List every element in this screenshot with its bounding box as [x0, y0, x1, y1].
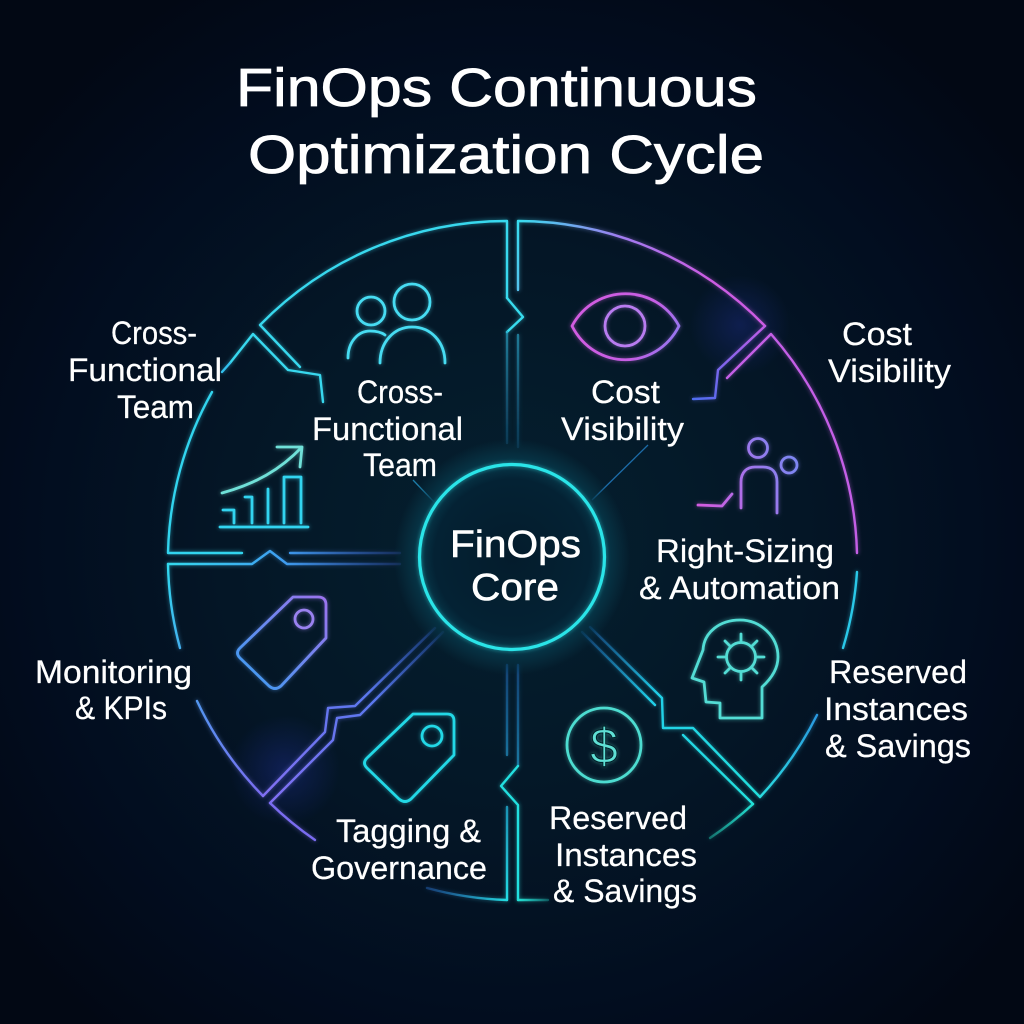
- label: right-sizing and automation: [639, 533, 840, 606]
- segment divider: bottom lines: [507, 665, 518, 900]
- segment arc: bottom left: [270, 803, 315, 840]
- label: right-sizing and automation: Right-Sizing: [656, 533, 834, 569]
- segment divider: bottom chevron: [501, 766, 518, 900]
- label: monitoring and KPIs: Monitoring: [35, 654, 192, 690]
- segment arc: left lower: [168, 564, 263, 796]
- label: cost visibility inner: [561, 374, 684, 447]
- core node: [394, 439, 630, 675]
- segment arc: lower right: [760, 715, 817, 797]
- segment outline: top right: [518, 221, 765, 326]
- segment outline: top left: [260, 221, 507, 367]
- segment arc: right lower: [843, 572, 857, 648]
- icon: person at desk: [698, 438, 797, 513]
- label: reserved instances outer: & Savings: [825, 728, 971, 764]
- label: cross-functional team outer: Functional: [68, 352, 222, 388]
- icon: price tag teal: [364, 714, 454, 802]
- segment arc: lower: [710, 804, 753, 838]
- icon: eye: [572, 294, 679, 360]
- label: monitoring and KPIs: [35, 654, 192, 726]
- label: reserved instances inner: Reserved: [549, 800, 687, 836]
- icon: head with gear: [692, 620, 778, 718]
- segment end: bottom right: [518, 899, 548, 901]
- segment arc: left upper: [168, 392, 242, 553]
- label: right-sizing and automation: & Automation: [639, 570, 840, 606]
- title: Optimization Cycle: [248, 125, 764, 185]
- segment divider: top lines: [507, 332, 518, 447]
- core label: FinOps: [450, 524, 581, 566]
- label: cost visibility outer: Visibility: [828, 353, 951, 389]
- spokes: [413, 445, 648, 503]
- label: monitoring and KPIs: & KPIs: [75, 690, 167, 726]
- title: FinOps Continuous: [236, 58, 757, 118]
- segment divider: lower left step: [263, 628, 443, 803]
- label: cost visibility inner: Visibility: [561, 411, 684, 447]
- corner glow: upper right: [690, 275, 790, 375]
- label: reserved instances outer: Reserved: [829, 654, 967, 690]
- label: cost visibility outer: [828, 316, 951, 389]
- core label second line: Core: [471, 567, 559, 609]
- label: cross-functional team outer: Cross-: [111, 315, 197, 351]
- icon: price tag violet: [238, 597, 326, 688]
- segment outline: right: [727, 334, 857, 553]
- label: cost visibility inner: Cost: [591, 374, 660, 410]
- cycle ring segments: [168, 221, 857, 900]
- label: cross-functional team inner: Functional: [312, 411, 463, 447]
- label: reserved instances inner: [549, 800, 697, 909]
- label: cost visibility outer: Cost: [842, 316, 912, 352]
- corner glow: lower left: [230, 715, 340, 825]
- label: cross-functional team outer: [68, 315, 222, 425]
- segment divider: top right step: [693, 326, 765, 399]
- label: cross-functional team inner: Cross-: [357, 374, 443, 410]
- label: cross-functional team inner: Team: [363, 447, 437, 483]
- segment arc: left upper top: [222, 363, 230, 372]
- label: tagging and governance: [311, 813, 487, 886]
- segment divider: top chevron: [507, 298, 523, 332]
- icon: dollar coin: $: [590, 718, 618, 774]
- icon: growth chart: [220, 447, 308, 527]
- label: tagging and governance: Tagging &: [336, 813, 481, 849]
- segment outline: left upper: [230, 334, 323, 402]
- segment divider: lower right step: [582, 627, 760, 804]
- title: [236, 58, 764, 185]
- label: reserved instances inner: & Savings: [553, 873, 697, 909]
- segment arc: bottom: [427, 888, 507, 900]
- icon: team: [348, 284, 445, 363]
- label: tagging and governance: Governance: [311, 850, 487, 886]
- label: reserved instances outer: Instances: [824, 691, 968, 727]
- label: cross-functional team inner: [312, 374, 463, 483]
- label: cross-functional team outer: Team: [117, 389, 194, 425]
- label: reserved instances outer: [824, 654, 971, 764]
- segment divider: left lines: [168, 551, 400, 564]
- label: reserved instances inner: Instances: [555, 837, 697, 873]
- icon: dollar coin: [567, 708, 641, 782]
